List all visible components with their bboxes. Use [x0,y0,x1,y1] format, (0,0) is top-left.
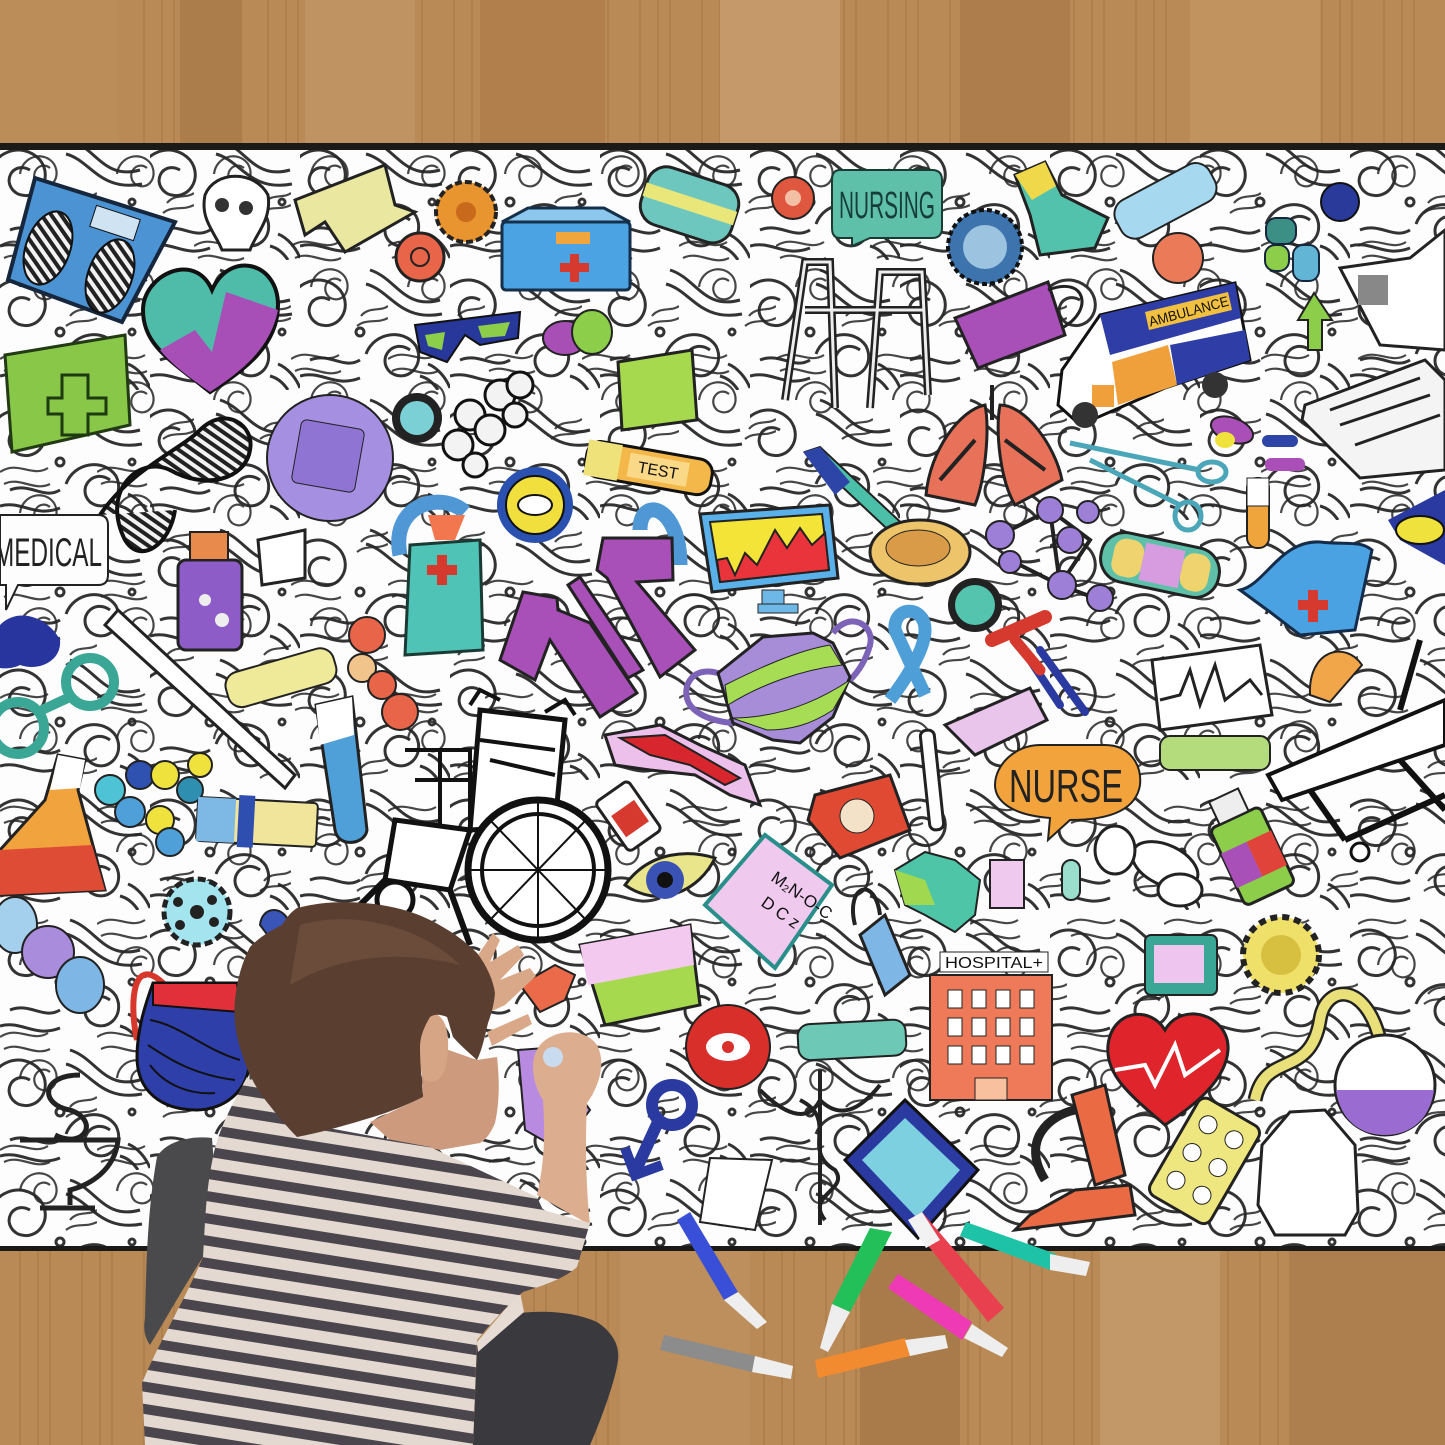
icon: teal circle [392,393,442,443]
boy tummy [477,1292,524,1352]
icon: teal round target [948,578,1002,632]
icon: small rocket pill [260,910,290,945]
icon: hospital [930,952,1052,1100]
icon: red circle [772,177,814,219]
boy ear [419,1013,448,1082]
icon: skull [204,176,269,250]
icon: chart paper with formula [705,835,836,968]
icon: yellow virus [1243,917,1319,993]
icon: teal dropper [803,447,925,555]
icon: navy spiral [1321,183,1359,221]
icon: orange heart edge [1310,652,1362,702]
icon: purple green pills [543,310,612,355]
icon: ecg chart [1152,645,1272,730]
icon: pink books [945,688,1047,755]
icon: red heart [1108,1014,1228,1125]
icon: chart paper with formula: M₂N-O-C [768,868,836,923]
icon: ambulance: AMBULANCE [1147,293,1230,330]
marker: blue [677,1212,767,1329]
icon: orange flask [0,755,105,895]
icon: capsules green [1062,860,1080,900]
icon: microscope [1015,1085,1135,1230]
icon: test tube label [583,439,715,497]
icon: teal virus [164,879,230,945]
icon: teal bandage [797,1019,907,1061]
icon: bathroom scale [8,178,175,322]
icon: vial [196,793,318,851]
icon: red teeth germ [605,725,760,805]
icon: edge navy yellow bacterium [1388,490,1445,565]
boy raised hand [470,933,536,1046]
nurse speech bubble: NURSE [1009,760,1123,812]
icon: green arrow [1298,293,1332,350]
icon: purple molecule [986,497,1113,611]
icon: purple scrubs [500,538,695,717]
icon: orange test tube [1247,478,1269,548]
icon: book [1340,230,1445,350]
icon: blue cloud [0,616,60,668]
nursing speech bubble: NURSING [839,185,935,227]
icon: rx mortar [20,1075,118,1208]
icon: striped mask [686,621,871,743]
icon: light blue bandage [1109,157,1222,244]
boy dark trousers [473,1312,618,1445]
medical speech bubble [0,515,108,610]
icon: green teal splat [895,852,980,932]
nursing speech bubble [832,170,942,246]
icon: padlock blue [853,890,910,995]
icon: blue swirl band [399,502,680,565]
icon: awareness ribbon [890,611,925,700]
icon: tag [990,860,1024,908]
icon: orange virus [436,182,496,242]
icon: red spiral [396,233,444,281]
marker: orange [815,1335,948,1378]
icon: monitor [700,505,838,613]
icon: grape cells [443,372,533,477]
icon: waffle bandage [258,530,305,585]
icon: red target [686,1005,770,1089]
icon: face mask teal yellow [635,162,744,248]
icon: round flask purple [1255,994,1435,1135]
icon: sunglasses [415,312,520,362]
icon: yellow dish [870,520,970,584]
icon: bottle syrup [1199,783,1295,906]
icon: red splat [520,965,575,1012]
boy neck and face [370,1040,499,1150]
icon: pen case [1302,360,1445,478]
icon: blue virus [948,210,1022,284]
icon: germs line [1095,826,1205,906]
icon: green bandage [1160,736,1270,770]
icon: first aid box [502,208,630,290]
marker: pink [888,1274,1008,1357]
icon: band aid teal pink [1096,528,1224,602]
icon: pills capsule group [1207,411,1305,471]
icon: scissors [1070,443,1226,530]
icon: bandage roll [295,165,415,252]
icon: nurse hat [1240,542,1372,635]
icon: walker [785,262,928,408]
icon: syringe [105,610,295,788]
icon: purple pack behind hand [518,1048,590,1150]
icon: purple plaster circle [267,395,393,521]
icon: jar [580,925,700,1025]
icon: purple mask [955,282,1082,368]
icon: green medical kit [5,335,130,452]
nurse speech bubble [995,745,1140,840]
marker: red [908,1212,1004,1322]
icon: dna helix [100,419,251,551]
icon: test tube label: TEST [636,459,680,483]
icon: lab coat [1258,1110,1358,1235]
icon: orange dotted circle [1153,233,1203,283]
boy arm and fist [533,1032,601,1225]
icon: blue purple pills [0,897,104,1013]
icon: lungs [926,385,1062,505]
icon: clipboard [845,1100,978,1238]
icon: caduceus [760,1070,880,1225]
icon: yellow pill pack [1146,1095,1263,1227]
poster [0,143,1445,1251]
icon: navy mask [133,974,250,1110]
icon: green blue blobs [1265,218,1319,281]
icon: red pill bottle [595,780,662,852]
marker: green [820,1228,892,1352]
icon: yellow bandage [222,645,340,710]
icon: teal glasses [0,658,114,754]
icon: thermometer [920,730,944,830]
icon: pink screen [1145,935,1217,995]
marker: grey [660,1335,793,1379]
icon: stretcher [1268,640,1445,861]
icon: heart teal purple [143,266,278,392]
icon: chart paper with formula: D C z [758,893,803,933]
icon: blue yellow blobs [95,753,212,856]
icon: ambulance [1058,283,1250,428]
marker: teal [960,1222,1090,1276]
icon: teal medicine bag [405,515,483,655]
icon: red kit [808,775,910,858]
icon: hospital: HOSPITAL+ [945,955,1043,972]
boy hair [234,902,495,1137]
icon: eye [625,854,715,899]
icon: teal flask [1015,162,1108,255]
icon: red capsules [348,617,418,730]
icon: purple bottle [178,532,242,650]
boy grey sock [144,1137,216,1345]
icon: gender symbol [625,1085,692,1175]
icon: paper note [700,1158,772,1230]
icon: green pack [618,350,697,430]
icon: petri dish yellow [497,467,573,543]
icon: blue test tube [316,697,367,842]
icon: crutch [992,617,1085,712]
boy striped shirt [130,1070,610,1445]
icon: wheelchair [360,690,608,945]
